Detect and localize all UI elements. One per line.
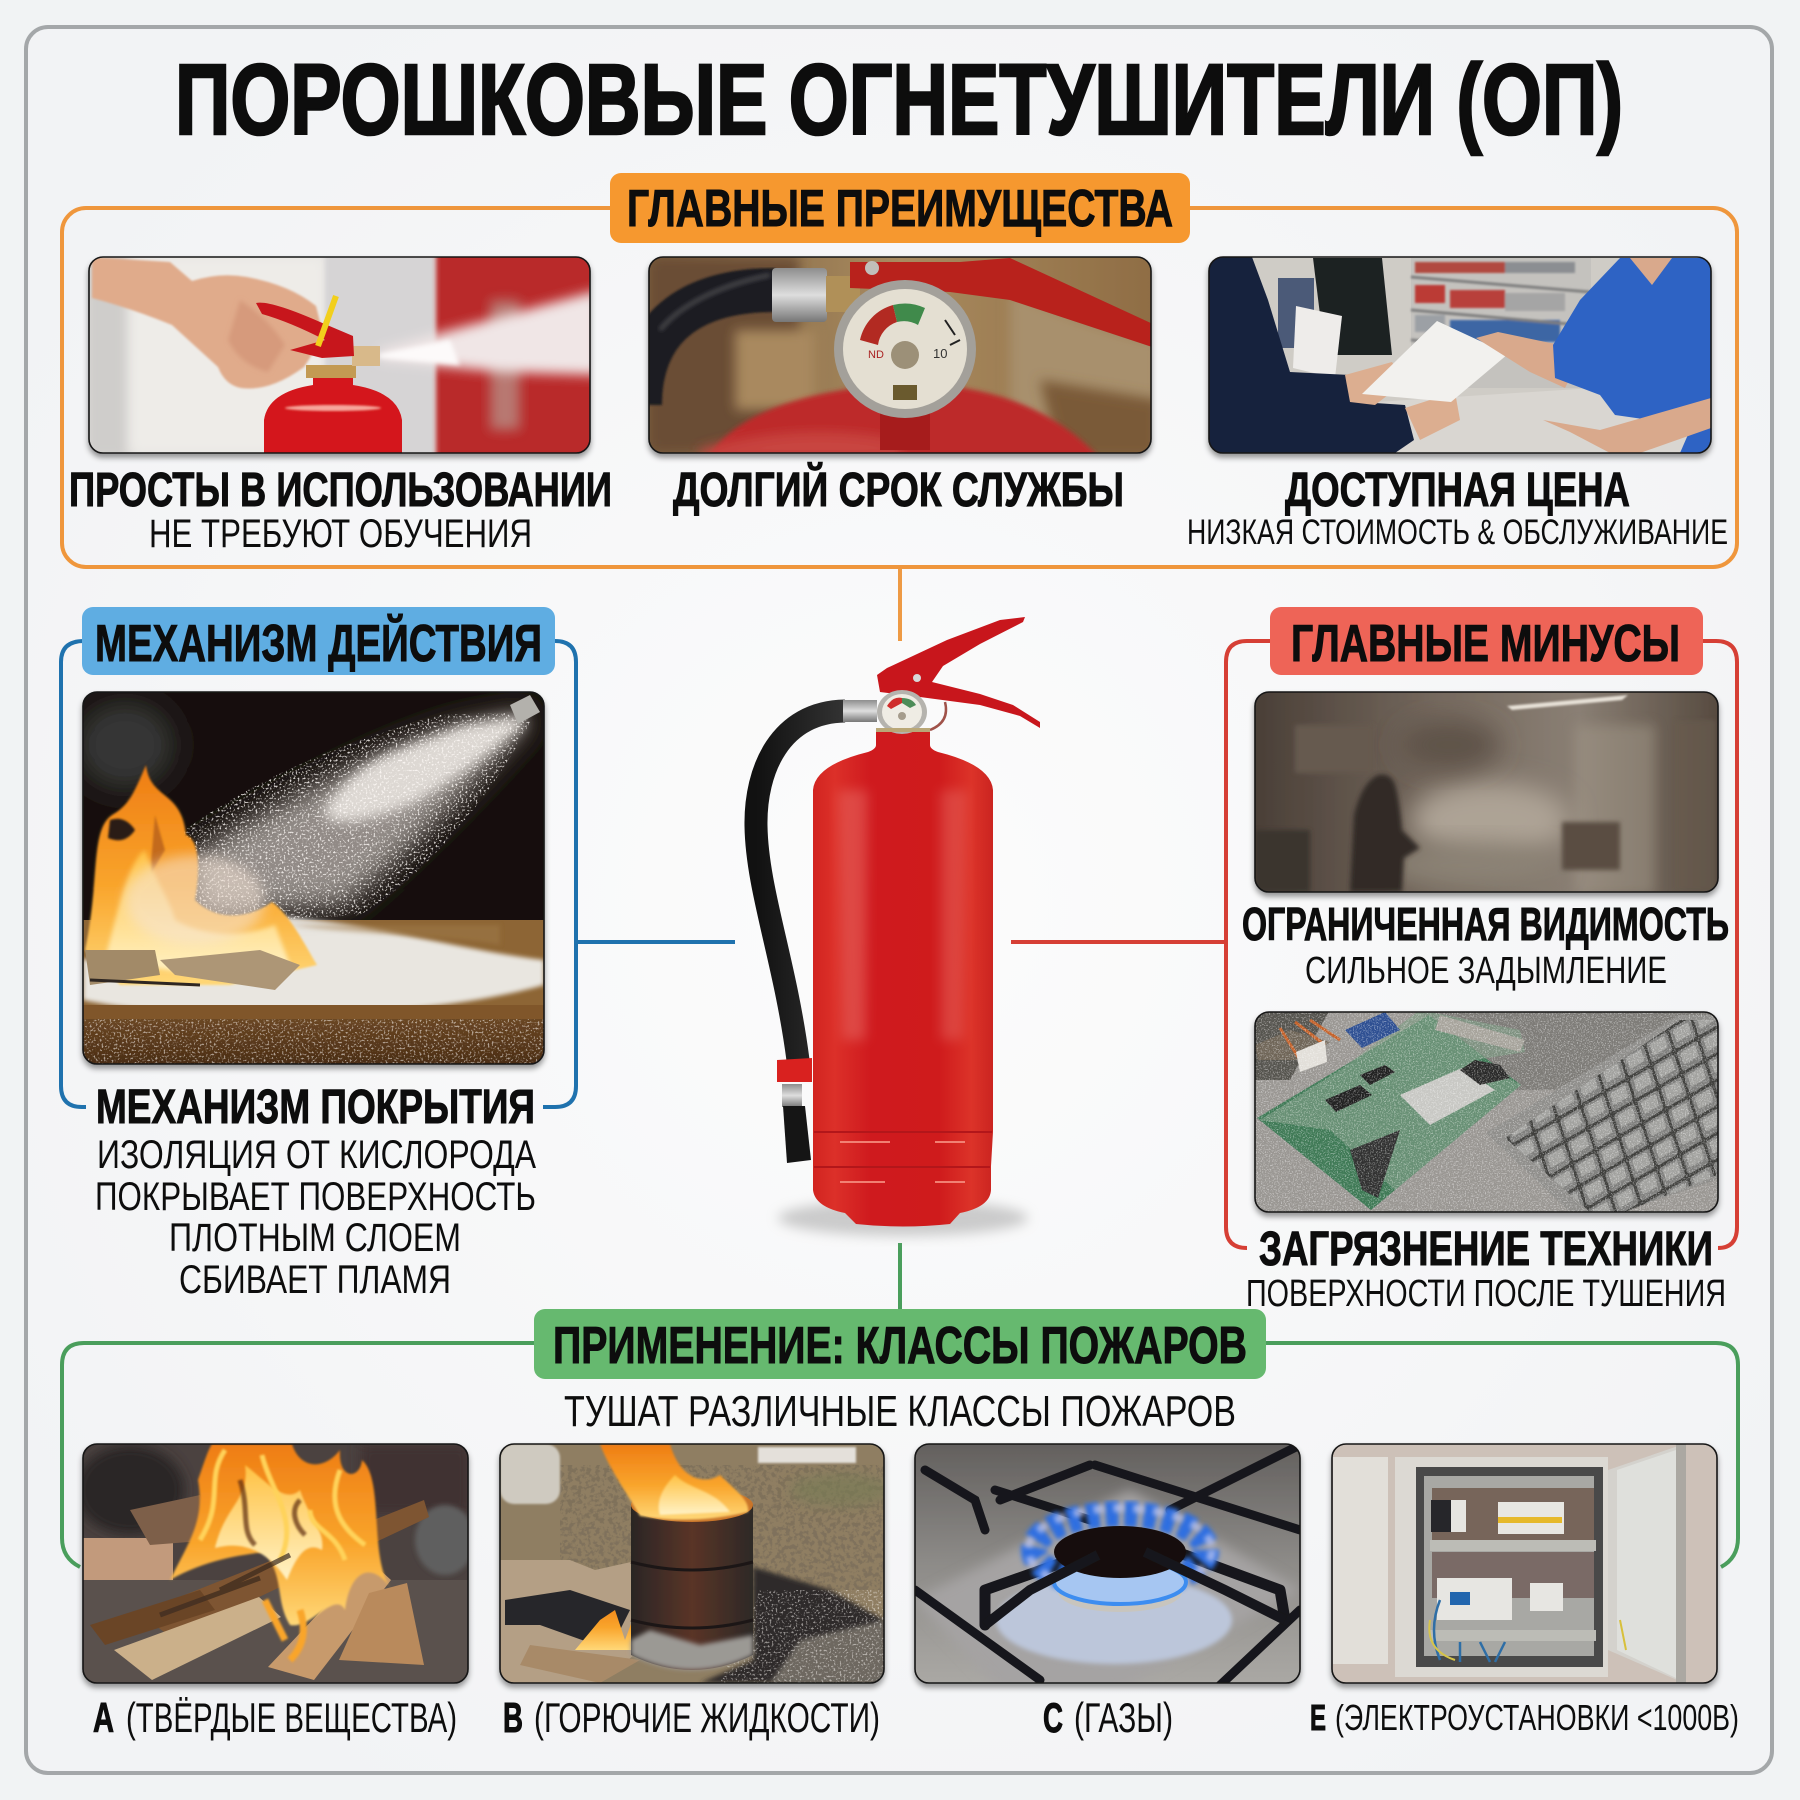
connector: minuses to extinguisher	[1011, 940, 1226, 944]
mechanism caption	[95, 1081, 536, 1302]
drawbacks heading	[1270, 607, 1703, 675]
pressure gauge	[876, 690, 930, 734]
label: class B: B	[503, 1694, 523, 1741]
label: class C: (ГАЗЫ)	[1074, 1694, 1173, 1741]
label: class A	[93, 1694, 457, 1741]
caption: easy to use: НЕ ТРЕБУЮТ ОБУЧЕНИЯ	[149, 512, 532, 556]
connector: advantages to extinguisher	[898, 567, 902, 641]
application heading: ПРИМЕНЕНИЕ: КЛАССЫ ПОЖАРОВ	[553, 1317, 1247, 1375]
label: class C: C	[1043, 1694, 1063, 1741]
advantages heading	[610, 173, 1190, 243]
mechanism heading: МЕХАНИЗМ ДЕЙСТВИЯ	[95, 614, 542, 673]
application subtitle: ТУШАТ РАЗЛИЧНЫЕ КЛАССЫ ПОЖАРОВ	[564, 1387, 1236, 1436]
caption: limited visibility	[1242, 898, 1729, 992]
drawbacks heading: ГЛАВНЫЕ МИНУСЫ	[1291, 615, 1680, 673]
photo: class A burning wood	[75, 1444, 475, 1683]
panel: application fire classes	[62, 1309, 1739, 1741]
hose clamp	[777, 1058, 812, 1082]
hose	[756, 711, 845, 1060]
illustration: fire extinguisher	[756, 617, 1040, 1236]
caption: affordable price: ДОСТУПНАЯ ЦЕНА	[1285, 464, 1630, 517]
panel: advantages	[62, 173, 1737, 567]
photo: powder on flame	[75, 692, 544, 1064]
connector: application to extinguisher	[898, 1243, 902, 1312]
mechanism caption: ПЛОТНЫМ СЛОЕМ	[169, 1216, 461, 1260]
cylinder body	[813, 731, 993, 1226]
label: class B: (ГОРЮЧИЕ ЖИДКОСТИ)	[534, 1694, 880, 1741]
connector: mechanism to extinguisher	[576, 940, 735, 944]
caption: easy to use: ПРОСТЫ В ИСПОЛЬЗОВАНИИ	[69, 464, 612, 517]
photo: purchase at counter	[1209, 257, 1711, 453]
caption: contamination of equipment	[1246, 1223, 1726, 1315]
photo: powder on electronics	[1255, 1010, 1730, 1212]
photo: smoke-filled room	[1255, 692, 1718, 895]
hose nozzle	[782, 1084, 811, 1163]
caption: limited visibility: СИЛЬНОЕ ЗАДЫМЛЕНИЕ	[1305, 950, 1667, 992]
label: class E: E	[1310, 1697, 1326, 1738]
mechanism caption: ПОКРЫВАЕТ ПОВЕРХНОСТЬ	[95, 1175, 536, 1219]
mechanism caption: МЕХАНИЗМ ПОКРЫТИЯ	[96, 1081, 535, 1134]
label: class C	[1043, 1694, 1173, 1741]
photo: pressure gauge: ND	[868, 349, 884, 361]
advantages heading: ГЛАВНЫЕ ПРЕИМУЩЕСТВА	[627, 180, 1173, 238]
mechanism caption: ИЗОЛЯЦИЯ ОТ КИСЛОРОДА	[97, 1133, 536, 1177]
caption: affordable price	[1187, 464, 1728, 552]
panel: main drawbacks	[1226, 607, 1737, 1315]
mechanism caption: СБИВАЕТ ПЛАМЯ	[179, 1258, 451, 1302]
mechanism heading	[82, 607, 555, 675]
photo: class B burning barrel	[500, 1444, 890, 1683]
photo: pressure gauge	[640, 257, 1160, 470]
photo: hand using extinguisher	[85, 250, 600, 460]
label: class A: (ТВЁРДЫЕ ВЕЩЕСТВА)	[126, 1694, 457, 1741]
label: class A: A	[93, 1694, 114, 1741]
application heading	[534, 1309, 1266, 1379]
photo: class E electrical panel	[1332, 1444, 1717, 1683]
handle levers	[877, 617, 1040, 730]
label: class B	[503, 1694, 880, 1741]
caption: long service life: ДОЛГИЙ СРОК СЛУЖБЫ	[673, 462, 1124, 517]
photo: pressure gauge: 10	[933, 346, 947, 361]
panel: mechanism of action	[61, 607, 576, 1302]
caption: easy to use	[69, 464, 612, 556]
photo: class C gas burner	[915, 1444, 1300, 1690]
